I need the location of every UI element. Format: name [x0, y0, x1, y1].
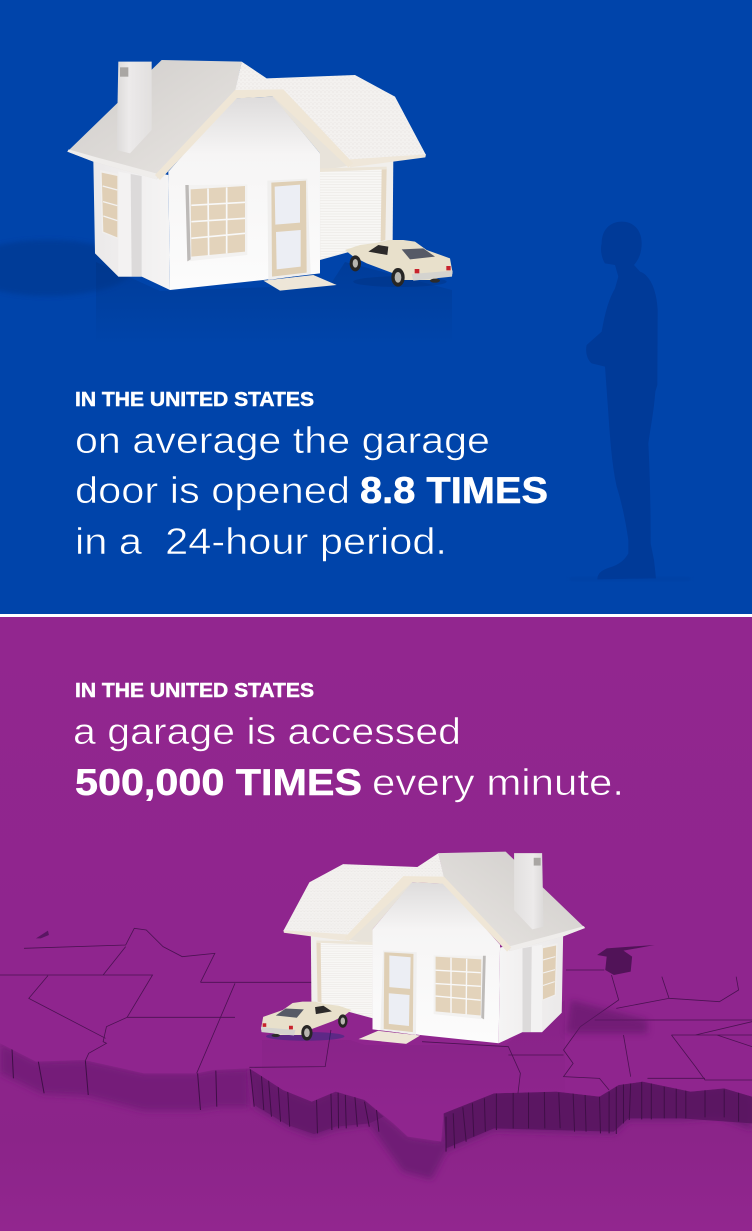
house shadow on ground — [0, 240, 133, 296]
highlighted number: 8.8 TIMES — [360, 470, 548, 511]
garage door — [320, 167, 387, 259]
statement line 3: in a 24-hour period. — [75, 521, 447, 562]
map of the United States — [0, 910, 752, 1179]
roof — [67, 60, 426, 180]
front step — [263, 275, 337, 291]
statement line 2: every minute. — [372, 762, 624, 803]
chimney — [117, 62, 152, 153]
person silhouette — [586, 222, 658, 579]
illustration: model house with car, mirrored — [261, 852, 585, 1044]
panel: purple garage access statistic — [0, 617, 752, 1231]
map extruded edge — [0, 1043, 752, 1179]
person ground shadow — [570, 577, 690, 581]
panel: blue garage door statistic — [0, 0, 752, 614]
house reflection on map — [262, 1000, 565, 1110]
eyebrow: IN THE UNITED STATES — [75, 388, 314, 411]
front window — [185, 184, 247, 261]
lake michigan — [597, 945, 655, 975]
state borders — [0, 928, 752, 1093]
statement line 1: a garage is accessed — [73, 711, 461, 752]
statement line 1: on average the garage — [75, 420, 490, 461]
highlighted number: 500,000 TIMES — [75, 762, 362, 803]
house cast shadow on map — [566, 1000, 647, 1033]
car — [345, 240, 453, 287]
statement line 2: door is opened — [75, 470, 350, 511]
map top surface — [0, 910, 752, 1142]
side window — [100, 170, 119, 239]
front door — [267, 179, 311, 280]
illustration: model house with car — [67, 60, 453, 291]
eyebrow: IN THE UNITED STATES — [75, 679, 314, 702]
text: garage door statistic — [75, 388, 548, 562]
text: garage access statistic — [73, 679, 624, 803]
house body — [93, 93, 393, 290]
small lake — [36, 931, 49, 938]
house reflection — [96, 262, 452, 345]
